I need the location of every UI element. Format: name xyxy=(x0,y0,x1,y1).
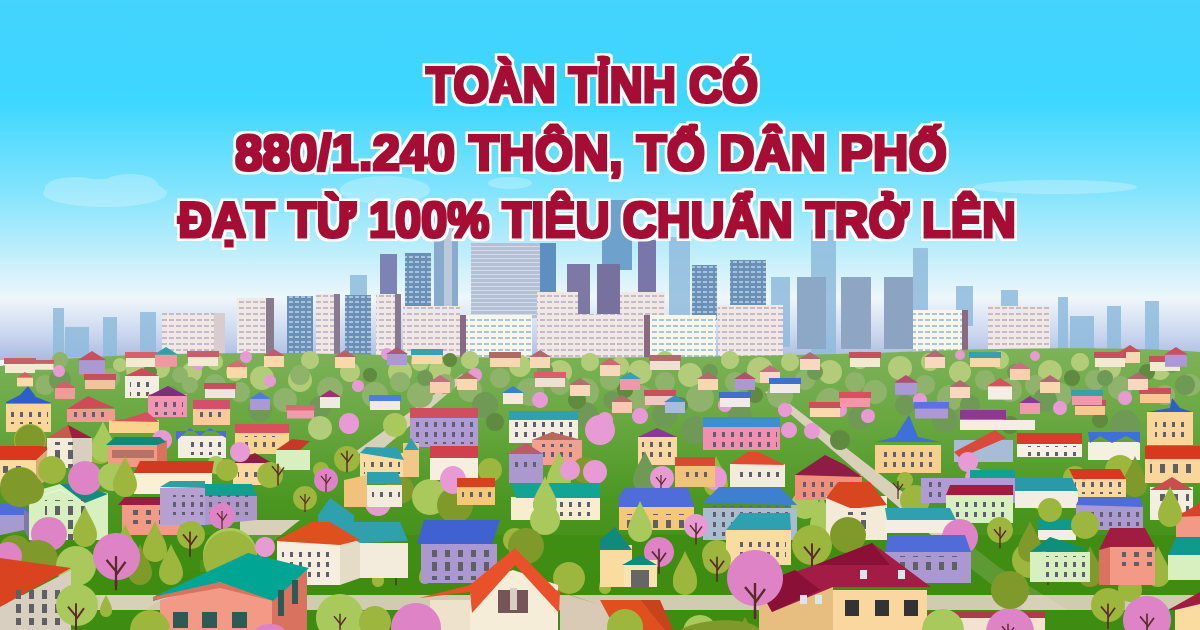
title: ĐẠT TỪ 100% TIÊU CHUẨN TRỞ LÊN xyxy=(178,191,1016,248)
distant trees xyxy=(35,348,1200,458)
ground xyxy=(0,348,1200,630)
lawn shading xyxy=(0,535,1200,630)
roads xyxy=(0,374,1200,630)
tree: pink bottom xyxy=(391,603,441,630)
front trees xyxy=(56,534,1171,630)
house: grey with red roof, left edge xyxy=(0,558,71,630)
house: yellow with teal roof xyxy=(726,513,791,565)
house: right edge green xyxy=(1168,538,1200,580)
trees: middle band xyxy=(14,413,1147,537)
tree: pink left xyxy=(94,534,140,590)
house: low crimson roof xyxy=(928,612,1045,630)
house: orange roof fragment xyxy=(600,600,673,630)
tree: small olive by centre xyxy=(607,609,717,630)
house: salmon with large teal roof xyxy=(153,553,309,630)
row houses: upper middle xyxy=(6,368,1193,485)
tree: olive right xyxy=(1091,588,1125,629)
sky background xyxy=(0,0,1200,360)
row houses: lower middle xyxy=(0,481,1200,545)
house: purple with blue roof right xyxy=(885,535,971,583)
title: TOÀN TỈNH CÓ xyxy=(426,57,758,113)
trees: foreground middle xyxy=(0,456,1182,609)
house: salmon with crimson roof xyxy=(1099,528,1155,585)
house: pale green with teal roof xyxy=(1030,537,1090,582)
house: purple with blue roof xyxy=(417,520,500,583)
tree: olive at foot xyxy=(130,610,170,630)
distant small houses xyxy=(4,345,1188,418)
house: white with orange roof xyxy=(275,522,408,585)
tree: pink by maroon house xyxy=(727,550,783,619)
skyline: near apartment blocks xyxy=(162,292,1050,364)
tree: pink right xyxy=(1123,596,1171,630)
tree: olive left xyxy=(56,584,98,630)
tree: olive bottom left road xyxy=(680,620,760,630)
title xyxy=(178,57,1016,248)
house: far right corner xyxy=(1168,592,1200,630)
title: 880/1.240 THÔN, TỔ DÂN PHỐ xyxy=(235,124,947,181)
house: cream with orange gambrel roof xyxy=(419,548,610,630)
tree: olive bottom xyxy=(316,594,391,630)
house: yellow with maroon roof xyxy=(757,543,931,630)
skyline: far towers xyxy=(53,200,1159,358)
clouds xyxy=(43,174,1137,227)
house: yellow left of centre xyxy=(600,527,657,587)
row houses: middle xyxy=(0,425,1200,523)
foreground houses xyxy=(0,513,1200,630)
tree: front right group xyxy=(922,571,1034,630)
